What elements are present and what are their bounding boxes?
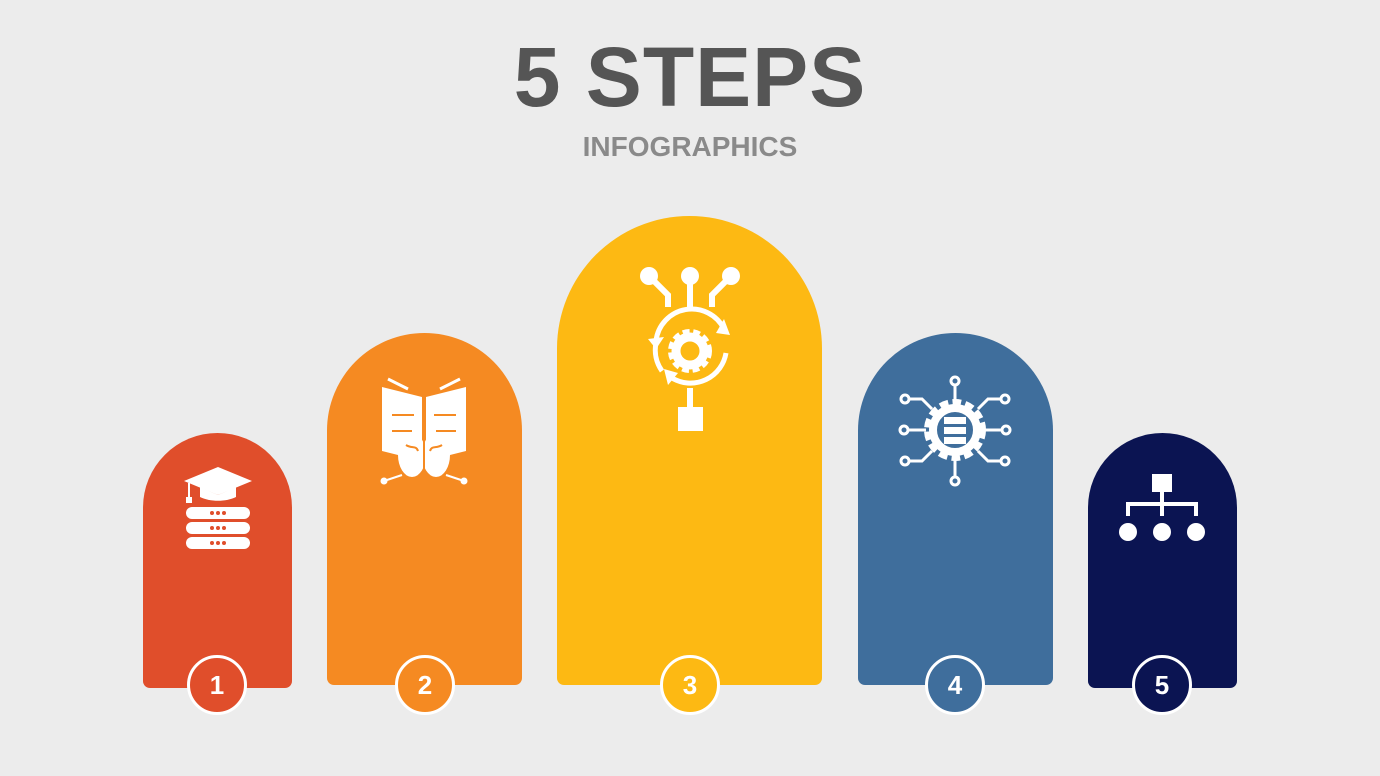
number 5 [1132, 655, 1192, 715]
title: 5 STEPS [514, 30, 866, 124]
number 2 [395, 655, 455, 715]
icon: hierarchy [1119, 474, 1205, 541]
icon: book brain [380, 378, 468, 484]
subtitle: INFOGRAPHICS [583, 131, 797, 162]
icon: process gear [640, 267, 740, 431]
panel: step 2 [327, 333, 522, 685]
number 4: 4 [948, 670, 962, 700]
icon: server gear circuit [898, 376, 1012, 486]
number 5: 5 [1155, 670, 1169, 700]
panel: step 1 [143, 433, 292, 688]
number 2: 2 [418, 670, 432, 700]
number 1: 1 [210, 670, 224, 700]
icon: graduation cap database [184, 467, 252, 549]
number 3: 3 [683, 670, 697, 700]
number 4 [925, 655, 985, 715]
number 3 [660, 655, 720, 715]
panel: step 5 [1088, 433, 1237, 688]
panel: step 3 [557, 216, 822, 685]
number 1 [187, 655, 247, 715]
panel: step 4 [858, 333, 1053, 685]
